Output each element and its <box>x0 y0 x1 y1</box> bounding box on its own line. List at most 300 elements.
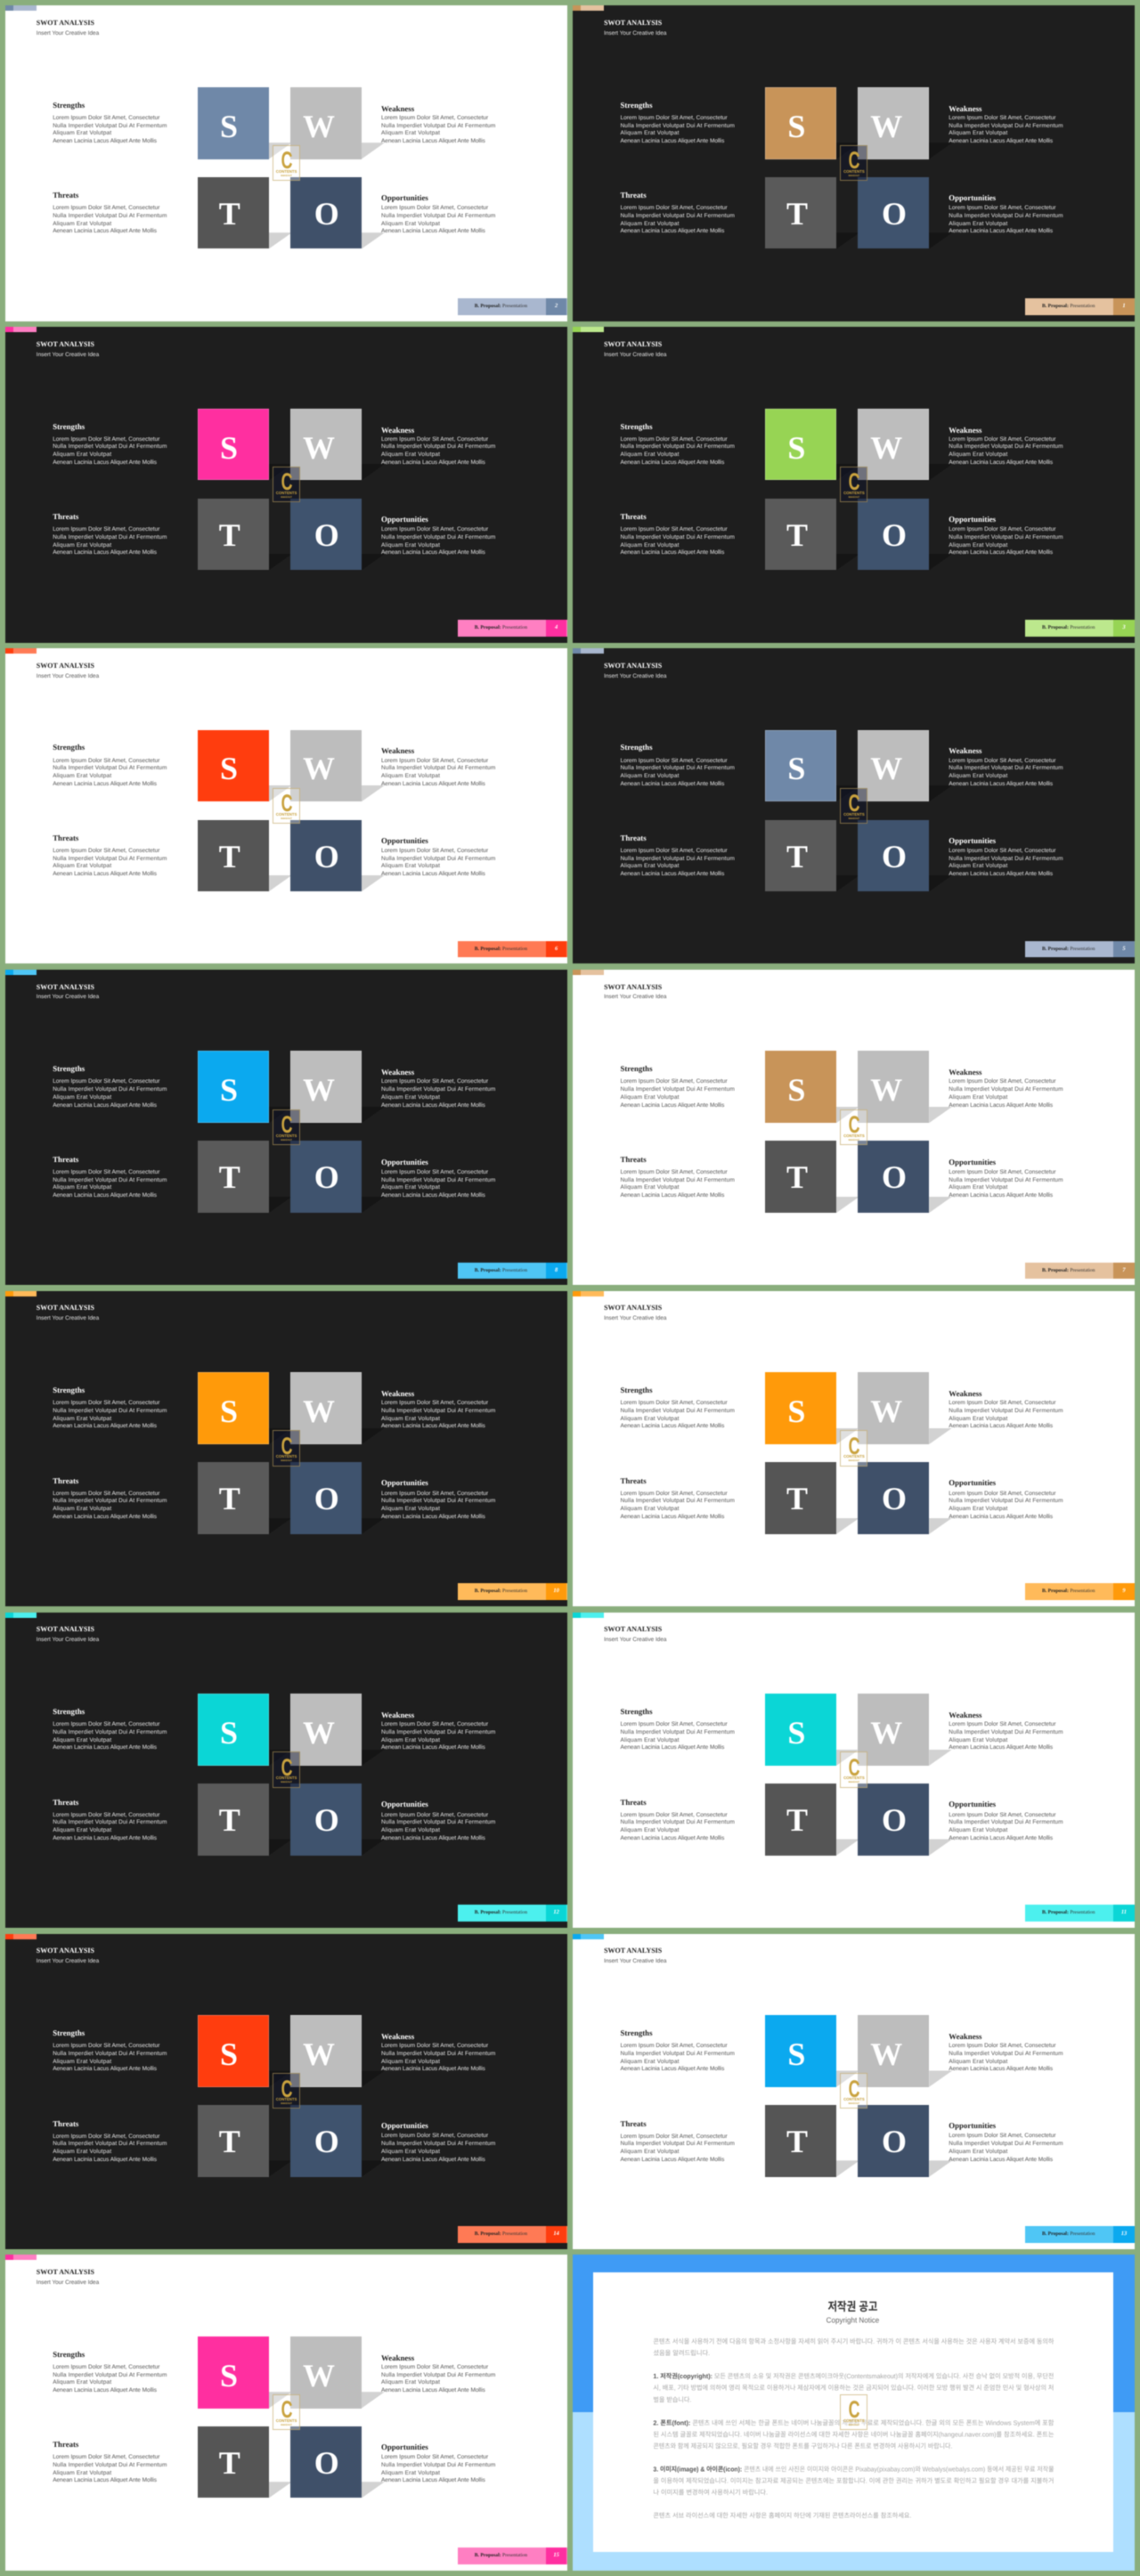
watermark logo: CONTENTS <box>843 812 865 817</box>
tile W: W <box>303 430 335 466</box>
watermark logo <box>273 145 300 181</box>
notice clause 2: 된 시스템 글꼴로 제작되었습니다. 네이버 나눔글꼴 라이선스에 대한 자세한 사항은 네이버 나눔글꼴 홈페이지(hangeul.naver.com)를 참조하세요. 폰트는 <box>654 2430 1054 2438</box>
tile T: T <box>219 2445 240 2481</box>
text: opportunities: Nulla Imperdiet Volutpat Dui At Fermentum <box>949 1177 1063 1183</box>
watermark logo: MAKEOUT <box>849 2424 859 2426</box>
watermark logo: C <box>281 1111 292 1138</box>
footer tag: B. Proposal: Presentation <box>475 304 527 309</box>
tile S <box>198 409 269 480</box>
text: strengths: Lorem Ipsum Dolor Sit Amet, Consectetur <box>620 758 728 764</box>
text: weakness: Weakness <box>381 426 414 435</box>
text: threats: Aliquam Erat Volutpat <box>53 1506 111 1512</box>
tile T <box>765 1141 836 1213</box>
text: strengths <box>620 1386 736 1429</box>
footer tag: 13 <box>1121 2231 1127 2237</box>
text: opportunities: Lorem Ipsum Dolor Sit Amet, Consectetur <box>949 2133 1056 2139</box>
text: opportunities: Opportunities <box>949 1800 996 1808</box>
footer tag: B. Proposal: Presentation <box>1042 2231 1095 2237</box>
text: threats: Aenean Lacinia Lacus Aliquet Ante Mollis <box>53 228 157 234</box>
text: opportunities: Opportunities <box>949 1478 996 1487</box>
corner tab <box>573 1291 604 1296</box>
footer tag: B. Proposal: Presentation <box>475 1910 527 1915</box>
text: opportunities: Lorem Ipsum Dolor Sit Amet, Consectetur <box>381 2133 488 2139</box>
text: opportunities: Opportunities <box>381 1158 428 1166</box>
text: opportunities: Aliquam Erat Volutpat <box>949 1506 1007 1512</box>
tile W: W <box>303 1715 335 1751</box>
corner tab <box>573 327 604 332</box>
text: strengths: Strengths <box>53 2350 85 2359</box>
text: opportunities: Lorem Ipsum Dolor Sit Amet, Consectetur <box>949 1491 1056 1497</box>
tile W: W <box>870 430 902 466</box>
tile O: O <box>314 1802 339 1838</box>
footer tag <box>458 1583 566 1600</box>
subtitle: Insert Your Creative Idea <box>37 1958 99 1964</box>
text: opportunities: Lorem Ipsum Dolor Sit Amet, Consectetur <box>949 1169 1056 1175</box>
text: weakness: Weakness <box>381 2353 414 2362</box>
text: opportunities: Nulla Imperdiet Volutpat Dui At Fermentum <box>381 2141 495 2147</box>
text: strengths <box>52 1386 167 1429</box>
notice clause 3 <box>654 2465 1054 2496</box>
watermark logo <box>840 788 867 824</box>
text: opportunities: Nulla Imperdiet Volutpat Dui At Fermentum <box>949 1498 1063 1504</box>
notice clause 1: 시, 배포, 기타 방법에 의하여 영리 목적으로 이용하거나 제삼자에게 이용하는 것은 금지되어 있습니다. 이러한 모방 행위 발견 시 준엄한 민사 및 형사상의 처 <box>654 2384 1054 2392</box>
tile O <box>290 2426 362 2498</box>
slide 16: copyright notice <box>573 2255 1135 2571</box>
tile W <box>290 2015 362 2087</box>
notice clause 3: 3. 이미지(image) & 아이콘(icon): 콘텐츠 내에 쓰인 사진은 이미지와 아이콘은 Pixabay(pixabay.com)와 Webalys(webalys.com) 등에서 제공된 무료 저작물 <box>654 2465 1054 2473</box>
tile O: O <box>314 517 339 553</box>
title: SWOT ANALYSIS <box>37 340 94 348</box>
text: strengths: Aliquam Erat Volutpat <box>620 1416 680 1422</box>
watermark logo: MAKEOUT <box>849 1781 859 1784</box>
watermark logo: C <box>848 2396 859 2423</box>
footer tag <box>458 1905 566 1922</box>
slide 7: dark SWOT, sky blue <box>5 970 566 1285</box>
watermark logo <box>840 2394 867 2430</box>
watermark logo: MAKEOUT <box>849 496 859 499</box>
text: strengths <box>620 1064 736 1109</box>
text: threats: Aliquam Erat Volutpat <box>620 542 680 549</box>
text: opportunities: Aenean Lacinia Lacus Aliquet Ante Mollis <box>381 1835 485 1841</box>
text: threats: Aliquam Erat Volutpat <box>620 1827 680 1833</box>
text: strengths: Nulla Imperdiet Volutpat Dui At Fermentum <box>53 2051 167 2057</box>
tile T <box>198 2426 269 2498</box>
text: strengths: Lorem Ipsum Dolor Sit Amet, Consectetur <box>53 1400 159 1406</box>
watermark logo: MAKEOUT <box>281 2424 292 2426</box>
tile S: S <box>220 1072 238 1108</box>
watermark logo <box>273 2394 300 2430</box>
watermark logo: CONTENTS <box>843 169 865 174</box>
text: threats: Aenean Lacinia Lacus Aliquet Ante Mollis <box>620 1514 724 1520</box>
footer tag: 7 <box>1122 1267 1126 1273</box>
text: threats: Nulla Imperdiet Volutpat Dui At Fermentum <box>620 2141 735 2147</box>
slide 13: dark SWOT, red-orange <box>5 1934 566 2249</box>
watermark logo: CONTENTS <box>843 1134 865 1138</box>
text: strengths: Aliquam Erat Volutpat <box>53 1416 111 1422</box>
footer tag <box>458 941 566 957</box>
text: strengths: Aliquam Erat Volutpat <box>53 130 111 136</box>
tile O <box>858 1784 929 1856</box>
text: strengths: Aenean Lacinia Lacus Aliquet Ante Mollis <box>620 2066 724 2072</box>
tile T <box>765 1462 836 1534</box>
text: strengths: Nulla Imperdiet Volutpat Dui At Fermentum <box>620 1408 735 1414</box>
text: opportunities: Aenean Lacinia Lacus Aliquet Ante Mollis <box>381 871 485 877</box>
text: threats: Nulla Imperdiet Volutpat Dui At Fermentum <box>53 1819 167 1825</box>
text: opportunities: Lorem Ipsum Dolor Sit Amet, Consectetur <box>949 526 1056 532</box>
title: SWOT ANALYSIS <box>604 1946 662 1954</box>
watermark logo: MAKEOUT <box>849 1459 859 1462</box>
tile S <box>765 409 836 480</box>
text: weakness: Aliquam Erat Volutpat <box>949 1737 1007 1743</box>
text: weakness: Aenean Lacinia Lacus Aliquet Ante Mollis <box>949 2066 1053 2072</box>
text: opportunities <box>949 2120 1063 2164</box>
text: opportunities: Lorem Ipsum Dolor Sit Amet, Consectetur <box>381 526 488 532</box>
tile O: O <box>314 839 339 874</box>
text: strengths: Lorem Ipsum Dolor Sit Amet, Consectetur <box>620 436 728 443</box>
text: strengths: Nulla Imperdiet Volutpat Dui At Fermentum <box>620 443 735 450</box>
footer tag <box>458 298 566 315</box>
text: weakness: Aenean Lacinia Lacus Aliquet Ante Mollis <box>381 459 485 466</box>
text: weakness: Aenean Lacinia Lacus Aliquet Ante Mollis <box>949 781 1053 787</box>
text: weakness: Lorem Ipsum Dolor Sit Amet, Consectetur <box>381 1721 488 1727</box>
tile O <box>290 177 362 248</box>
text: strengths: Nulla Imperdiet Volutpat Dui At Fermentum <box>53 1086 167 1093</box>
text: strengths: Aenean Lacinia Lacus Aliquet Ante Mollis <box>53 138 157 144</box>
text: weakness: Aliquam Erat Volutpat <box>381 2059 440 2065</box>
watermark logo <box>273 1109 300 1145</box>
tile W <box>858 1051 929 1123</box>
text: weakness: Aenean Lacinia Lacus Aliquet Ante Mollis <box>381 2066 485 2072</box>
tile W <box>858 730 929 801</box>
text: opportunities: Aliquam Erat Volutpat <box>381 1506 440 1512</box>
text: weakness: Weakness <box>949 1711 981 1719</box>
text: opportunities: Aliquam Erat Volutpat <box>949 863 1007 869</box>
text: threats: Threats <box>53 1155 78 1164</box>
tile S <box>198 1694 269 1766</box>
text: opportunities: Aliquam Erat Volutpat <box>381 2470 440 2476</box>
watermark logo: C <box>848 2076 859 2102</box>
watermark logo: MAKEOUT <box>849 817 859 820</box>
watermark logo: CONTENTS <box>843 1776 865 1780</box>
watermark logo: CONTENTS <box>843 2418 865 2423</box>
text: threats: Nulla Imperdiet Volutpat Dui At Fermentum <box>620 1498 735 1504</box>
text: weakness: Lorem Ipsum Dolor Sit Amet, Consectetur <box>949 1400 1056 1406</box>
slide 8: white SWOT, tan <box>573 970 1135 1285</box>
text: strengths <box>620 743 736 787</box>
tile T <box>198 177 269 248</box>
tile S: S <box>220 109 238 144</box>
tile S: S <box>787 1715 805 1751</box>
text: opportunities: Nulla Imperdiet Volutpat Dui At Fermentum <box>381 1498 495 1504</box>
tile T: T <box>219 2124 240 2159</box>
tile S: S <box>220 1394 238 1429</box>
tile O: O <box>882 196 907 232</box>
corner tab <box>5 1934 37 1939</box>
watermark logo: CONTENTS <box>843 2097 865 2101</box>
text: weakness: Aliquam Erat Volutpat <box>381 130 440 136</box>
tile T <box>765 1784 836 1856</box>
tile O: O <box>882 1802 907 1838</box>
text: weakness: Lorem Ipsum Dolor Sit Amet, Consectetur <box>949 436 1056 443</box>
tile S: S <box>220 2358 238 2393</box>
slide 14: white SWOT, sky blue <box>573 1934 1135 2249</box>
subtitle: Insert Your Creative Idea <box>37 1637 99 1643</box>
watermark logo: C <box>281 2076 292 2102</box>
text: opportunities: Aenean Lacinia Lacus Aliquet Ante Mollis <box>949 1514 1053 1520</box>
footer tag: B. Proposal: Presentation <box>1042 1589 1095 1594</box>
text: threats <box>52 191 167 234</box>
tile O <box>858 499 929 570</box>
text: weakness: Nulla Imperdiet Volutpat Dui At Fermentum <box>949 123 1063 129</box>
text: strengths: Nulla Imperdiet Volutpat Dui At Fermentum <box>620 2051 735 2057</box>
text: weakness: Aenean Lacinia Lacus Aliquet Ante Mollis <box>949 459 1053 466</box>
watermark logo: MAKEOUT <box>849 2102 859 2105</box>
tile W <box>290 1694 362 1766</box>
text: weakness: Lorem Ipsum Dolor Sit Amet, Consectetur <box>949 1721 1056 1727</box>
text: weakness <box>948 104 1063 144</box>
text: strengths: Aenean Lacinia Lacus Aliquet Ante Mollis <box>620 1423 724 1429</box>
watermark logo: C <box>848 790 859 817</box>
text: weakness: Nulla Imperdiet Volutpat Dui At Fermentum <box>949 1408 1063 1414</box>
watermark logo: C <box>848 147 859 174</box>
watermark logo: C <box>848 468 859 495</box>
text: strengths: Strengths <box>53 101 85 110</box>
text: weakness: Nulla Imperdiet Volutpat Dui At Fermentum <box>949 1729 1063 1735</box>
text: opportunities: Nulla Imperdiet Volutpat Dui At Fermentum <box>949 1819 1063 1825</box>
text: opportunities: Lorem Ipsum Dolor Sit Amet, Consectetur <box>381 205 488 211</box>
title: SWOT ANALYSIS <box>604 1625 662 1633</box>
slide 2: dark SWOT, tan <box>573 5 1135 321</box>
text: threats: Nulla Imperdiet Volutpat Dui At Fermentum <box>620 534 735 540</box>
text: threats <box>620 1797 735 1842</box>
tile T <box>765 819 836 891</box>
tile S: S <box>787 2036 805 2072</box>
tile O: O <box>882 2124 907 2159</box>
watermark logo: MAKEOUT <box>281 1459 292 1462</box>
text: opportunities: Aliquam Erat Volutpat <box>381 542 440 549</box>
text: strengths: Aenean Lacinia Lacus Aliquet Ante Mollis <box>53 781 157 787</box>
text: threats: Aliquam Erat Volutpat <box>620 2149 680 2155</box>
watermark logo: CONTENTS <box>276 169 297 174</box>
watermark logo: C <box>281 1433 292 1459</box>
title: SWOT ANALYSIS <box>604 340 662 348</box>
watermark logo: MAKEOUT <box>281 496 292 499</box>
text: weakness: Weakness <box>381 1068 414 1077</box>
text: opportunities: Aenean Lacinia Lacus Aliquet Ante Mollis <box>949 1192 1053 1199</box>
text: strengths: Strengths <box>620 1707 652 1716</box>
text: strengths: Lorem Ipsum Dolor Sit Amet, Consectetur <box>53 436 159 443</box>
text: weakness: Lorem Ipsum Dolor Sit Amet, Consectetur <box>949 758 1056 764</box>
text: strengths: Aenean Lacinia Lacus Aliquet Ante Mollis <box>53 2387 157 2393</box>
text: threats: Aenean Lacinia Lacus Aliquet Ante Mollis <box>620 228 724 234</box>
tile W <box>290 1372 362 1444</box>
title: SWOT ANALYSIS <box>604 662 662 670</box>
footer tag: B. Proposal: Presentation <box>1042 1910 1095 1915</box>
tile S <box>198 87 269 159</box>
text: weakness: Nulla Imperdiet Volutpat Dui At Fermentum <box>381 2372 495 2378</box>
text: threats: Aenean Lacinia Lacus Aliquet Ante Mollis <box>620 1192 724 1199</box>
text: weakness: Nulla Imperdiet Volutpat Dui At Fermentum <box>381 1086 495 1093</box>
title: SWOT ANALYSIS <box>37 1304 94 1312</box>
text: opportunities: Opportunities <box>949 1158 996 1166</box>
subtitle: Insert Your Creative Idea <box>37 673 99 679</box>
tile W: W <box>870 1072 902 1108</box>
text: strengths: Aliquam Erat Volutpat <box>620 1094 680 1101</box>
text: threats: Nulla Imperdiet Volutpat Dui At Fermentum <box>53 856 167 862</box>
text: strengths: Lorem Ipsum Dolor Sit Amet, Consectetur <box>620 1721 728 1727</box>
tile S <box>198 2015 269 2087</box>
text: threats: Lorem Ipsum Dolor Sit Amet, Consectetur <box>53 848 159 854</box>
text: threats: Nulla Imperdiet Volutpat Dui At Fermentum <box>53 534 167 540</box>
text: strengths: Strengths <box>620 2028 652 2037</box>
watermark logo: CONTENTS <box>843 491 865 495</box>
tile W: W <box>303 2036 335 2072</box>
subtitle: Insert Your Creative Idea <box>604 1958 666 1964</box>
tile T: T <box>786 1159 808 1195</box>
tile S: S <box>787 1072 805 1108</box>
text: weakness <box>381 1389 496 1429</box>
text: weakness: Aenean Lacinia Lacus Aliquet Ante Mollis <box>381 2387 485 2393</box>
watermark logo <box>840 1751 867 1788</box>
text: strengths: Aliquam Erat Volutpat <box>620 1737 680 1743</box>
text: weakness: Aliquam Erat Volutpat <box>381 1737 440 1743</box>
text: weakness <box>948 1389 1063 1429</box>
text: threats: Nulla Imperdiet Volutpat Dui At Fermentum <box>53 2462 167 2468</box>
text: opportunities: Aenean Lacinia Lacus Aliquet Ante Mollis <box>381 228 485 234</box>
text: weakness: Lorem Ipsum Dolor Sit Amet, Consectetur <box>381 1400 488 1406</box>
slide 5: white SWOT, red-orange <box>5 648 566 963</box>
text: strengths <box>52 422 167 466</box>
text: opportunities <box>381 515 496 556</box>
tile T <box>198 1141 269 1213</box>
text: opportunities: Opportunities <box>949 193 996 202</box>
watermark logo: CONTENTS <box>276 1776 297 1780</box>
subtitle: Insert Your Creative Idea <box>604 1315 666 1321</box>
text: strengths <box>52 1064 167 1109</box>
tile W: W <box>303 2358 335 2393</box>
title: SWOT ANALYSIS <box>37 1625 94 1633</box>
tile T: T <box>786 839 808 874</box>
text: threats: Aenean Lacinia Lacus Aliquet Ante Mollis <box>620 1835 724 1841</box>
watermark logo: MAKEOUT <box>281 817 292 820</box>
footer tag: 4 <box>555 624 558 630</box>
text: weakness: Nulla Imperdiet Volutpat Dui At Fermentum <box>381 1408 495 1414</box>
text: strengths: Aliquam Erat Volutpat <box>620 451 680 458</box>
text: threats <box>620 2117 735 2164</box>
watermark logo <box>273 467 300 502</box>
corner tab <box>5 1291 37 1296</box>
watermark logo <box>273 1430 300 1467</box>
text: weakness: Weakness <box>949 426 981 435</box>
slide 4: dark SWOT, green <box>573 327 1135 643</box>
text: weakness: Lorem Ipsum Dolor Sit Amet, Consectetur <box>949 2043 1056 2049</box>
tile O <box>290 2105 362 2177</box>
footer tag <box>1025 298 1135 315</box>
watermark logo <box>273 1751 300 1788</box>
tile S <box>765 87 836 159</box>
text: threats: Aliquam Erat Volutpat <box>53 542 111 549</box>
slide 10: white SWOT, orange <box>573 1291 1135 1606</box>
text: strengths: Nulla Imperdiet Volutpat Dui At Fermentum <box>53 123 167 129</box>
text: opportunities: Lorem Ipsum Dolor Sit Amet, Consectetur <box>949 848 1056 854</box>
text: weakness: Aenean Lacinia Lacus Aliquet Ante Mollis <box>949 1423 1053 1429</box>
text: opportunities: Aenean Lacinia Lacus Aliquet Ante Mollis <box>381 1514 485 1520</box>
text: opportunities: Nulla Imperdiet Volutpat Dui At Fermentum <box>949 534 1063 540</box>
watermark logo: MAKEOUT <box>281 175 292 177</box>
tile W: W <box>870 1394 902 1429</box>
tile W <box>290 87 362 159</box>
tile O: O <box>314 1481 339 1516</box>
text: strengths: Strengths <box>620 743 652 752</box>
text: opportunities <box>948 836 1063 877</box>
text: threats: Aenean Lacinia Lacus Aliquet Ante Mollis <box>53 1192 157 1199</box>
slide 6: dark SWOT, slate <box>573 648 1135 963</box>
tile T <box>765 499 836 570</box>
text: opportunities: Nulla Imperdiet Volutpat Dui At Fermentum <box>381 1819 495 1825</box>
watermark logo <box>273 2073 300 2109</box>
text: strengths: Lorem Ipsum Dolor Sit Amet, Consectetur <box>620 2043 728 2049</box>
title: SWOT ANALYSIS <box>604 19 662 27</box>
text: weakness <box>381 1068 496 1109</box>
subtitle: Insert Your Creative Idea <box>37 30 99 37</box>
footer tag: 10 <box>553 1588 559 1594</box>
tile W <box>290 1051 362 1123</box>
footer tag <box>458 2548 566 2564</box>
tile W: W <box>870 109 902 144</box>
text: threats: Threats <box>53 2119 78 2128</box>
text: threats: Nulla Imperdiet Volutpat Dui At Fermentum <box>53 2141 167 2147</box>
text: weakness: Lorem Ipsum Dolor Sit Amet, Consectetur <box>381 115 488 121</box>
tile S <box>198 1051 269 1123</box>
text: strengths <box>620 422 736 466</box>
text: threats: Aenean Lacinia Lacus Aliquet Ante Mollis <box>620 2157 724 2163</box>
text: strengths: Lorem Ipsum Dolor Sit Amet, Consectetur <box>620 1400 728 1406</box>
text: strengths: Nulla Imperdiet Volutpat Dui At Fermentum <box>53 443 167 450</box>
text: strengths: Nulla Imperdiet Volutpat Dui At Fermentum <box>53 1729 167 1735</box>
text: strengths: Aliquam Erat Volutpat <box>620 2059 680 2065</box>
tile O: O <box>882 1481 907 1516</box>
tile W <box>858 1372 929 1444</box>
tile W: W <box>870 751 902 786</box>
subtitle: Insert Your Creative Idea <box>604 673 666 679</box>
notice closing line: 콘텐츠 서브 라이선스에 대한 자세한 사항은 홈페이지 하단에 기재된 콘텐츠라이선스를 참조하세요. <box>654 2511 912 2519</box>
text: opportunities: Opportunities <box>381 193 428 202</box>
watermark logo <box>840 1430 867 1467</box>
watermark logo: C <box>848 1754 859 1781</box>
tile W <box>858 2015 929 2087</box>
text: threats <box>620 1476 736 1520</box>
title: SWOT ANALYSIS <box>37 19 94 27</box>
text: weakness: Weakness <box>949 1068 981 1077</box>
watermark logo: C <box>281 790 292 817</box>
footer tag <box>1025 1263 1135 1279</box>
text: weakness: Aliquam Erat Volutpat <box>381 451 440 458</box>
text: opportunities <box>381 2442 495 2485</box>
text: weakness: Weakness <box>381 104 414 113</box>
text: threats: Threats <box>620 1476 647 1485</box>
text: opportunities: Aliquam Erat Volutpat <box>381 2149 440 2155</box>
footer tag <box>458 2226 566 2243</box>
text: opportunities: Opportunities <box>381 1800 428 1808</box>
text: weakness: Aliquam Erat Volutpat <box>949 451 1007 458</box>
text: threats: Aenean Lacinia Lacus Aliquet Ante Mollis <box>620 549 724 556</box>
title: SWOT ANALYSIS <box>37 983 94 991</box>
corner tab <box>573 1613 604 1618</box>
text: opportunities: Aenean Lacinia Lacus Aliquet Ante Mollis <box>381 2477 485 2483</box>
text: threats: Aenean Lacinia Lacus Aliquet Ante Mollis <box>53 549 157 556</box>
watermark logo: CONTENTS <box>276 2418 297 2423</box>
tile T: T <box>219 1481 240 1516</box>
